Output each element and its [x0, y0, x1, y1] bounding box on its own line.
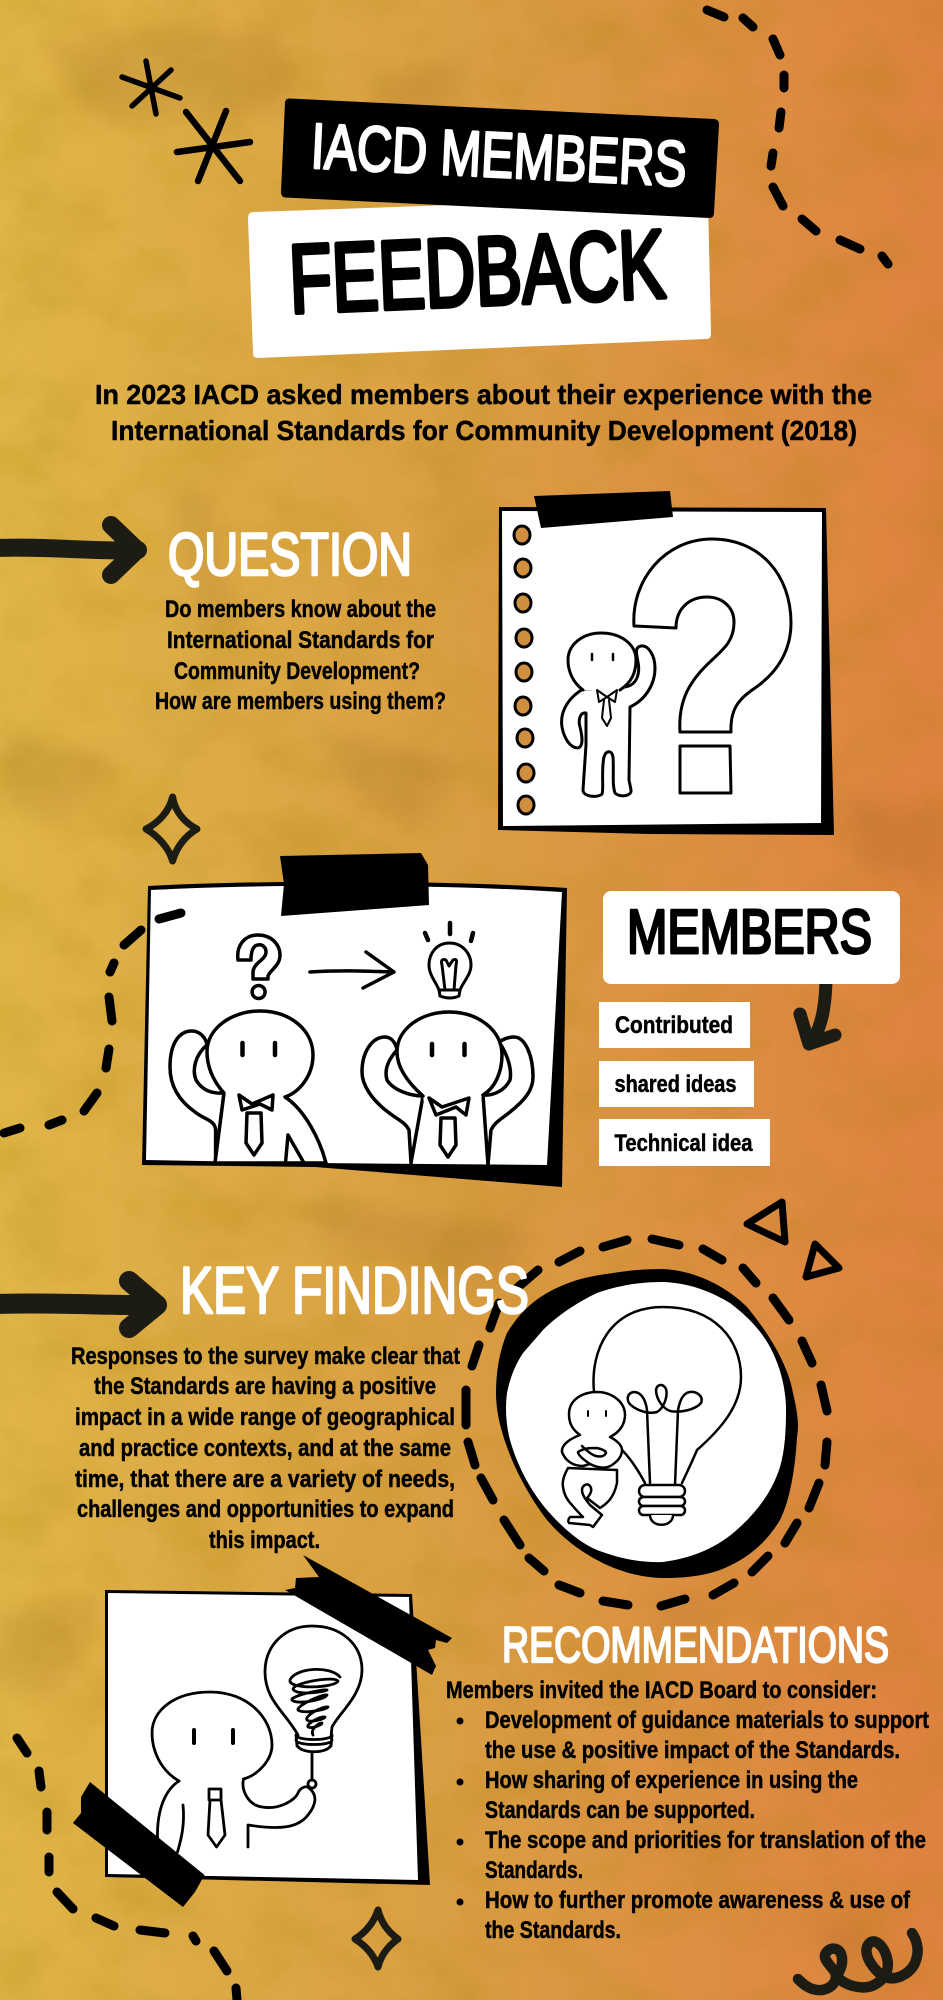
recommendations text list: the Standards.: [485, 1917, 621, 1944]
icon: bottom diamond: [355, 1910, 398, 1967]
tag: shared ideas: shared ideas: [614, 1071, 736, 1098]
recommendations text list: [446, 1677, 929, 1944]
dashed ring around bulb circle: [466, 1239, 827, 1606]
panel: notebook page with question mark: [498, 491, 834, 835]
big question mark: [634, 539, 791, 793]
title white banner: FEEDBACK: [248, 196, 711, 358]
tag: Contributed: [599, 1002, 750, 1048]
tag: Contributed: Contributed: [615, 1012, 733, 1039]
heading: KEY FINDINGS: KEY FINDINGS: [180, 1253, 529, 1327]
question body text: Do members know about the: [165, 596, 436, 623]
panel corner dash: [159, 913, 181, 919]
tape top right: [285, 1555, 452, 1675]
person holding bulb: [152, 1692, 315, 1852]
tape bottom left: [73, 1782, 204, 1907]
heading card: MEMBERS: MEMBERS: [627, 898, 872, 967]
tape on notebook: [534, 491, 673, 528]
key findings body text: and practice contexts, and at the same: [79, 1435, 451, 1462]
arrow between icons: [310, 952, 394, 988]
tape on idea panel: [280, 853, 429, 916]
icon: squiggle bottom right: [798, 1933, 918, 1990]
arrow to key findings heading: [0, 1281, 157, 1328]
intro text: International Standards for Community Development (2018): [111, 415, 857, 446]
figure: person with idea: [362, 1012, 533, 1165]
decorative dashed curve left of idea panel: [4, 930, 141, 1133]
tag: Technical idea: [599, 1119, 770, 1166]
question body text: Community Development?: [174, 658, 420, 685]
title white banner: FEEDBACK: FEEDBACK: [287, 209, 667, 334]
recommendations text list: Standards.: [485, 1857, 583, 1884]
bulb with swirl: [265, 1626, 362, 1788]
recommendations text list: How sharing of experience in using the: [485, 1767, 858, 1794]
figure: person with question: [170, 1011, 326, 1163]
notebook holes: [514, 526, 534, 814]
heading: QUESTION: QUESTION: [168, 521, 412, 588]
small question mark: [238, 935, 280, 998]
key findings body text: Responses to the survey make clear that: [71, 1343, 460, 1370]
heading card: MEMBERS: [603, 891, 900, 984]
intro text: In 2023 IACD asked members about their experience with the: [95, 379, 872, 410]
title black banner: IACD MEMBERS: [281, 98, 719, 218]
key findings body text: challenges and opportunities to expand: [77, 1496, 454, 1523]
title black banner: IACD MEMBERS: IACD MEMBERS: [309, 110, 688, 200]
decorative dashed curve top right: [707, 10, 888, 264]
key findings body text: the Standards are having a positive: [94, 1373, 436, 1400]
question body text: International Standards for: [167, 627, 434, 654]
recommendations text list: Standards can be supported.: [485, 1797, 755, 1824]
panel: recommendations illustration: [73, 1555, 452, 1907]
small light bulb: [425, 923, 473, 998]
icon: asterisk stars: [122, 61, 250, 181]
arrow to question heading: [0, 525, 138, 575]
thinking person: [562, 633, 655, 796]
tag: Technical idea: Technical idea: [614, 1130, 753, 1157]
key findings body text: impact in a wide range of geographical: [75, 1404, 455, 1431]
circle illustration: person leaning on bulb: [496, 1269, 798, 1578]
icons: triangles: [747, 1202, 839, 1277]
decorative dashed curve bottom left: [17, 1738, 237, 2000]
tag: shared ideas: [599, 1061, 754, 1107]
key findings body text: [71, 1343, 460, 1554]
leaning person: [562, 1392, 625, 1527]
arrow from members card: [800, 975, 835, 1044]
question body text: How are members using them?: [155, 688, 446, 715]
question body text: [155, 596, 446, 715]
intro text: [95, 379, 872, 446]
key findings body text: time, that there are a variety of needs,: [75, 1466, 455, 1493]
panel: idea illustration: [142, 853, 567, 1187]
bullet markers: [456, 1718, 464, 1906]
key findings body text: this impact.: [209, 1527, 320, 1554]
large bulb: [594, 1307, 741, 1525]
icon: four-point diamond: [146, 797, 197, 861]
